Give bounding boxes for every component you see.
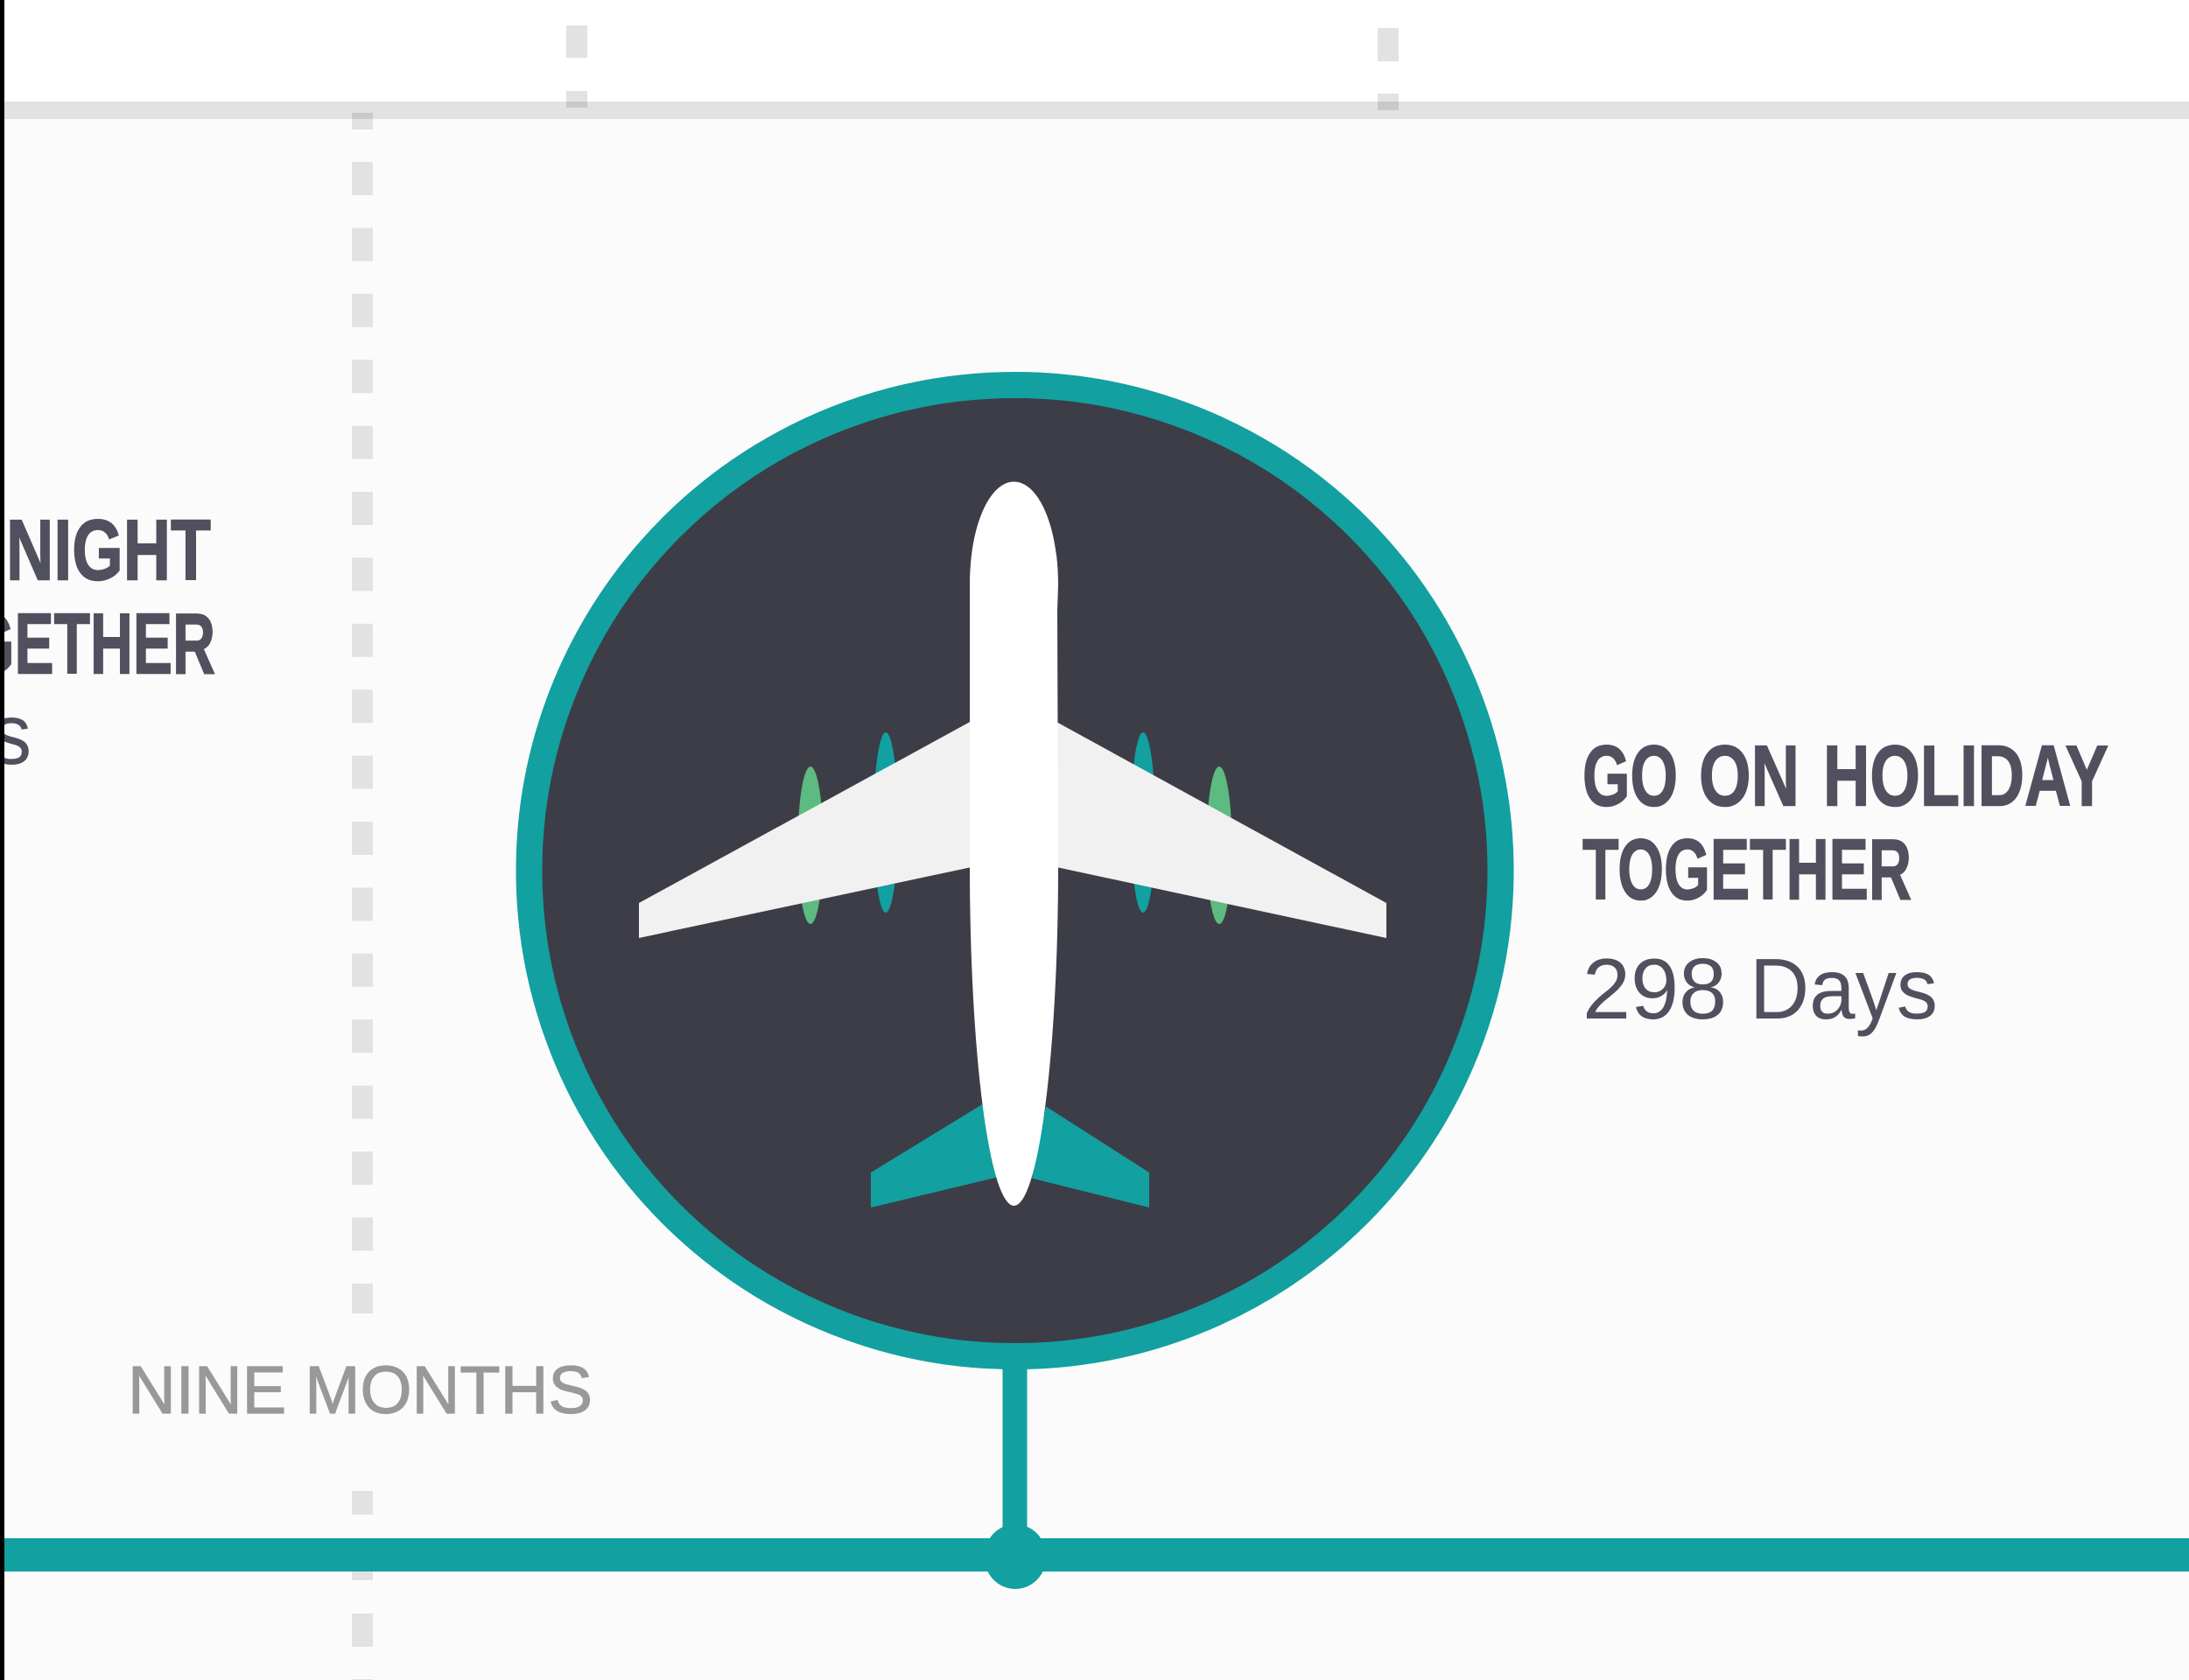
dashed timeline marker: left bbox=[352, 113, 373, 1680]
heading: night together (clipped by left edge): NIGHT bbox=[6, 502, 211, 598]
heading: night together (clipped by left edge) bbox=[0, 502, 215, 782]
wings bbox=[639, 721, 1386, 938]
text: go on holiday together, 298 days: ON bbox=[1699, 728, 1800, 824]
dashed marker: top centre-left bbox=[566, 25, 587, 108]
tail fins bbox=[871, 1104, 1149, 1208]
timeline connector: stem and node bbox=[984, 1348, 1047, 1589]
text: go on holiday together, 298 days: TOGETHER bbox=[1582, 821, 1912, 917]
text: go on holiday together, 298 days: 298 bbox=[1582, 941, 1727, 1037]
text: go on holiday together, 298 days: Days bbox=[1750, 941, 1938, 1037]
text: go on holiday together, 298 days bbox=[1582, 728, 2108, 1037]
engines bbox=[798, 732, 1232, 924]
icon: airplane badge bbox=[529, 385, 1500, 1356]
label: nine months: NINE MONTHS bbox=[128, 1353, 593, 1428]
dashed marker: top centre-right bbox=[1378, 28, 1399, 110]
left edge bar bbox=[0, 0, 4, 1680]
timeline bar bbox=[0, 1538, 2189, 1572]
badge circle bbox=[529, 385, 1500, 1356]
fuselage bbox=[970, 481, 1058, 1206]
text: go on holiday together, 298 days: GO bbox=[1582, 728, 1678, 824]
